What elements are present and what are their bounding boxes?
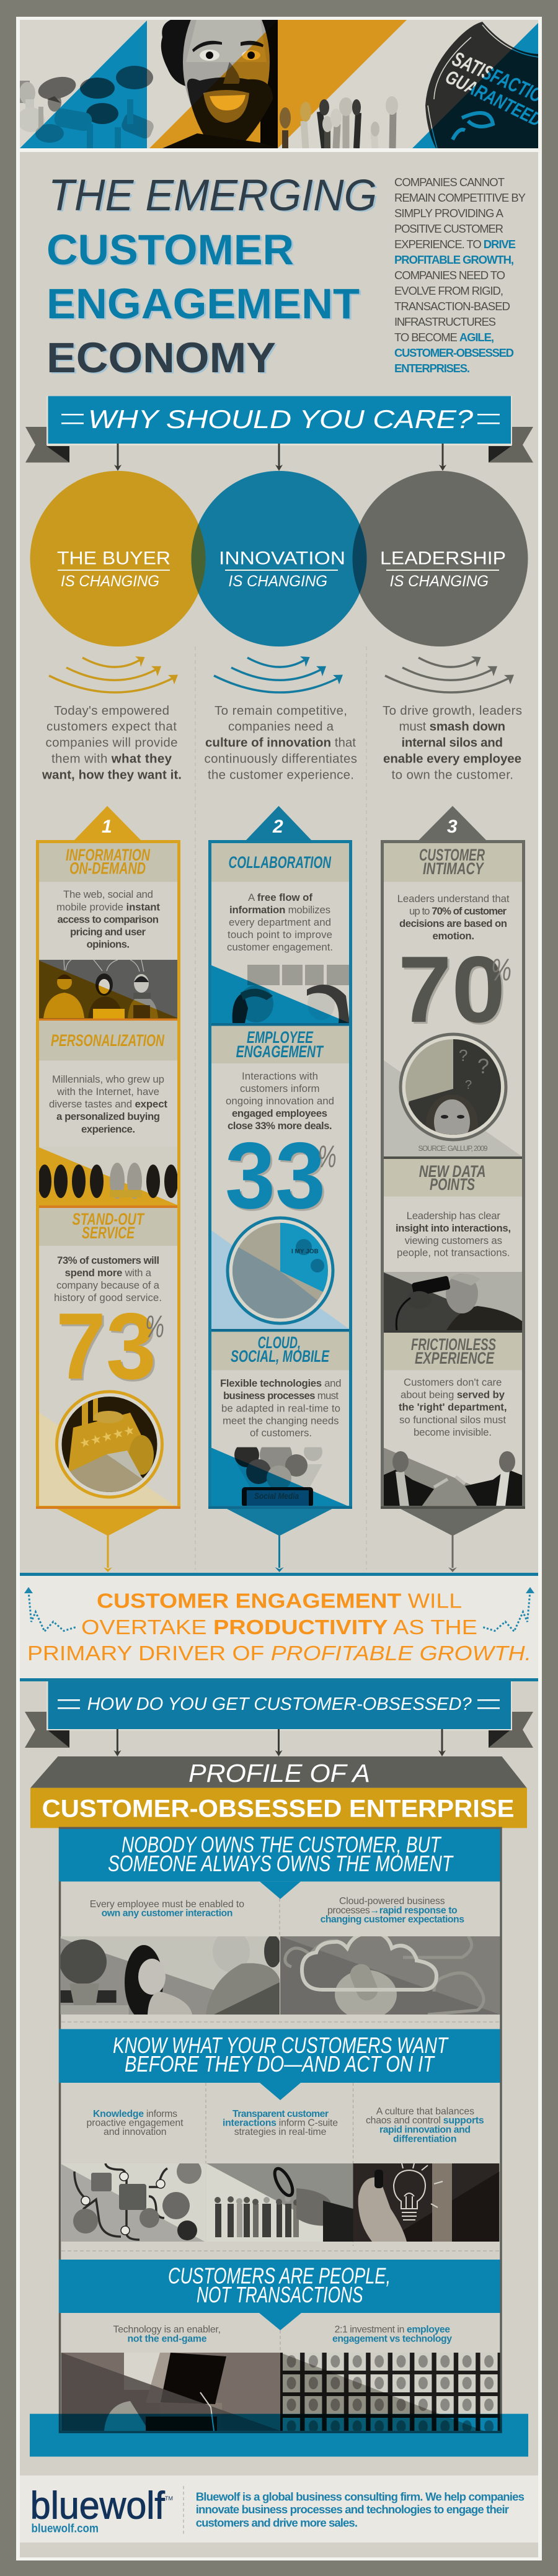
text: culture: differentiation — [393, 2134, 456, 2144]
column 3 frame — [382, 841, 523, 1508]
section: information on-demand: opinions. — [87, 939, 130, 950]
section: collaboration: COLLABORATION — [228, 853, 331, 872]
arrows from banner to profile — [113, 1729, 446, 1756]
blue triangle over shield — [412, 23, 538, 148]
stat: 70 percent: 70 — [398, 937, 505, 1042]
circle: the buyer — [30, 471, 206, 646]
section: frictionless experience: about being served by — [401, 1389, 505, 1401]
text: cloud-powered: changing customer expectations — [321, 1915, 464, 1925]
stat: 33 percent: % — [318, 1139, 337, 1174]
circle: innovation — [191, 471, 367, 646]
section: stand-out service — [37, 1205, 179, 1304]
text: transparent interactions — [223, 2109, 338, 2137]
circle: leadership — [352, 471, 528, 646]
intro paragraph: EVOLVE FROM RIGID, — [394, 284, 503, 297]
text: innovation: To remain competitive, — [215, 704, 347, 718]
section: personalization: PERSONALIZATION — [51, 1031, 164, 1050]
header image strip — [20, 20, 538, 148]
speech bubbles illustration — [17, 66, 156, 149]
intro paragraph: ENTERPRISES. — [394, 362, 470, 375]
section 3: customers are people — [59, 2260, 500, 2431]
text: the buyer: Today's empowered — [54, 704, 169, 718]
profile heading — [30, 1756, 527, 1828]
section: collaboration — [211, 843, 349, 953]
company description: customers and drive more sales. — [196, 2516, 358, 2529]
text: technology: not the end-game — [128, 2334, 207, 2345]
section: stand-out service: history of good service. — [54, 1292, 162, 1304]
section: cloud, social, mobile — [210, 1329, 350, 1439]
intro paragraph: TRANSACTION-BASED — [394, 300, 510, 313]
blue heading band 3 — [59, 2260, 500, 2330]
text: culture — [366, 2106, 484, 2144]
text: own any customer interaction — [90, 1899, 244, 1918]
icon: dotted rising arrow right — [483, 1587, 534, 1632]
section: collaboration: information mobilizes — [229, 904, 330, 916]
raised hands — [280, 96, 398, 148]
number tab 3 — [418, 806, 487, 841]
label: the buyer — [57, 548, 170, 590]
logo: bluewolf: bluewolf — [30, 2484, 166, 2528]
dashed separator 2 — [61, 2250, 499, 2252]
image: finger touching cloud — [280, 1933, 500, 2019]
image: woman talking to customer — [61, 1936, 280, 2015]
section: information on-demand: mobile provide instant — [56, 901, 160, 913]
text: own any customer interaction: own any customer interaction — [102, 1908, 232, 1918]
section: new data points: people, not transactions. — [397, 1247, 510, 1258]
conclusion line 1: CUSTOMER ENGAGEMENT WILL — [97, 1590, 462, 1612]
intro paragraph: CUSTOMER-OBSESSED — [394, 346, 514, 359]
company description: Bluewolf is a global business consulting firm. We help companies — [196, 2490, 525, 2503]
label: leadership: IS CHANGING — [390, 573, 489, 590]
banner: why should you care — [25, 396, 533, 463]
section: collaboration: A free flow of — [248, 892, 312, 903]
section: employee engagement — [210, 1023, 350, 1132]
number tab 1 — [74, 806, 141, 841]
section: personalization: Millennials, who grew up — [52, 1073, 164, 1085]
text: leadership: to own the customer. — [392, 768, 513, 782]
text: knowledge: and innovation — [104, 2127, 167, 2137]
section: customer intimacy: CUSTOMER — [419, 846, 485, 864]
column 1: the buyer — [36, 806, 180, 1572]
intro paragraph: SIMPLY PROVIDING A — [394, 207, 504, 220]
blue heading band 1: SOMEONE ALWAYS OWNS THE MOMENT — [108, 1851, 454, 1876]
section: personalization: experience. — [81, 1123, 135, 1135]
company description: innovate business processes and technologies to engage their — [196, 2503, 509, 2516]
intro paragraph: POSITIVE CUSTOMER — [394, 222, 503, 235]
section: new data points: Leadership has clear — [407, 1210, 500, 1222]
text: knowledge: Knowledge informs — [93, 2109, 177, 2119]
section: employee engagement: ENGAGEMENT — [236, 1042, 324, 1061]
section: personalization: a personalized buying — [56, 1111, 160, 1122]
gold parallelogram — [149, 20, 407, 148]
intro paragraph: COMPANIES CANNOT — [394, 176, 505, 189]
section: employee engagement: customers inform — [240, 1083, 320, 1094]
section: employee engagement: ongoing innovation and — [226, 1095, 334, 1107]
conclusion panel — [20, 1573, 538, 1681]
section: new data points: NEW DATA — [419, 1162, 486, 1181]
banner: why should you care: WHY SHOULD YOU CARE? — [88, 405, 474, 434]
section: cloud, social, mobile: of customers. — [250, 1427, 312, 1439]
section: employee engagement: EMPLOYEE — [247, 1028, 314, 1047]
intro paragraph: REMAIN COMPETITIVE BY — [394, 191, 526, 204]
image: two men pointing at each other — [383, 1447, 523, 1507]
section: cloud, social, mobile: CLOUD, — [258, 1333, 301, 1352]
curved arrows: buyer — [49, 656, 178, 692]
section: information on-demand — [39, 843, 177, 950]
section: personalization: with the Internet, have — [56, 1086, 159, 1098]
text: cloud-powered: Cloud-powered business — [339, 1896, 445, 1907]
section: customer intimacy: up to 70% of customer — [409, 905, 507, 917]
number tab 2 — [246, 806, 312, 841]
column 2: innovation — [208, 806, 352, 1572]
intro paragraph: EXPERIENCE. TO DRIVE — [394, 238, 516, 251]
text: own any customer interaction: Every employee must be enabled to — [90, 1899, 244, 1910]
footer — [20, 2475, 538, 2542]
text: transparent interactions: Transparent customer — [232, 2109, 329, 2119]
round image: woman with question marks: ? — [465, 1078, 472, 1092]
text: the buyer: customers expect that — [46, 720, 177, 734]
section: frictionless experience: FRICTIONLESS — [411, 1335, 496, 1354]
section: cloud, social, mobile: business processes must — [223, 1390, 339, 1402]
number tab 1: 1 — [102, 816, 112, 837]
image: people looking at sticky notes — [210, 965, 350, 1023]
text: leadership: must smash down — [399, 720, 505, 734]
column 2 frame — [210, 841, 351, 1508]
text: cloud-powered: processes→rapid response to — [327, 1905, 458, 1916]
label: innovation — [219, 548, 345, 590]
text: culture: chaos and control supports — [366, 2116, 484, 2126]
round image: woman with question marks — [400, 1034, 506, 1154]
section: cloud, social, mobile: SOCIAL, MOBILE — [231, 1347, 330, 1366]
section: customer intimacy: emotion. — [433, 930, 474, 942]
blue heading band 3: NOT TRANSACTIONS — [197, 2282, 363, 2307]
logo: bluewolf: TM — [165, 2495, 173, 2502]
bottom pointer and arrow 3 — [381, 1506, 525, 1572]
blue heading band 2: BEFORE THEY DO—AND ACT ON IT — [125, 2051, 435, 2077]
intro paragraph: PROFITABLE GROWTH, — [394, 253, 514, 266]
image: row of shoes — [37, 1147, 179, 1205]
pale blue triangle — [211, 1230, 349, 1329]
source note: SOURCE: GALLUP, 2009 — [418, 1145, 487, 1153]
image: three people under chalk arrows — [37, 960, 179, 1019]
company description — [196, 2490, 525, 2529]
three overlapping circles — [30, 471, 528, 646]
blue heading band 2: KNOW WHAT YOUR CUSTOMERS WANT — [113, 2033, 449, 2058]
section: customer intimacy: INTIMACY — [423, 859, 485, 878]
image: social media bubbles and phone: Social Media — [254, 1491, 299, 1501]
text: the buyer: companies will provide — [46, 735, 177, 749]
section: information on-demand: INFORMATION — [66, 846, 150, 864]
label: leadership: LEADERSHIP — [380, 548, 506, 569]
title line: engagement: ENGAGEMENT — [46, 280, 360, 328]
blue heading band 3: CUSTOMERS ARE PEOPLE, — [168, 2263, 391, 2289]
section: information on-demand: ON-DEMAND — [69, 859, 146, 877]
section: frictionless experience: become invisible. — [414, 1426, 492, 1438]
text: the buyer — [42, 704, 182, 782]
section: collaboration: touch point to improve — [228, 929, 332, 941]
conclusion line 3: PRIMARY DRIVER OF PROFITABLE GROWTH. — [27, 1642, 531, 1665]
image: man with binoculars — [383, 1272, 523, 1331]
section: customer intimacy — [384, 843, 522, 942]
conclusion line 2: OVERTAKE PRODUCTIVITY AS THE — [81, 1616, 477, 1639]
banner: how do you get customer-obsessed — [25, 1681, 533, 1748]
number tab 3: 3 — [447, 816, 458, 837]
text: leadership: enable every employee — [383, 752, 521, 766]
text: culture: A culture that balances — [376, 2106, 474, 2117]
section: stand-out service: company because of a — [56, 1279, 160, 1291]
section: personalization — [37, 1019, 179, 1135]
text: investment — [332, 2325, 452, 2345]
label: the buyer: THE BUYER — [57, 548, 170, 569]
section 1: nobody owns the customer — [59, 1829, 500, 2022]
intro paragraph: COMPANIES NEED TO — [394, 269, 505, 282]
column 1 frame — [37, 841, 179, 1508]
icon: dotted rising arrow left — [24, 1587, 76, 1632]
blue heading band 1 — [59, 1829, 500, 1899]
section: information on-demand: pricing and user — [70, 926, 146, 938]
section: new data points: viewing customers as — [405, 1235, 502, 1246]
text: cloud-powered — [321, 1896, 464, 1925]
image: hand drawing light bulb — [353, 2163, 499, 2242]
section: new data points: insight into interactions, — [396, 1222, 511, 1234]
stat: 73 percent: % — [145, 1309, 164, 1344]
text: innovation: culture of innovation that — [205, 735, 356, 749]
intro paragraph: INFRASTRUCTURES — [394, 315, 496, 328]
curved arrows: leadership — [385, 656, 514, 692]
section: collaboration: customer engagement. — [227, 941, 333, 953]
section: personalization: diverse tastes and expect — [49, 1098, 167, 1110]
section: employee engagement: engaged employees — [232, 1107, 327, 1119]
section: frictionless experience: so functional silos must — [399, 1414, 506, 1426]
section: stand-out service: 73% of customers will — [57, 1254, 159, 1266]
profile heading: PROFILE OF A — [188, 1759, 370, 1787]
curved arrows: innovation — [214, 656, 343, 692]
profile container frame — [60, 1828, 501, 2432]
text: innovation: continuously differentiates — [205, 752, 357, 766]
stat: 70 percent: % — [491, 952, 512, 987]
title line: customer: CUSTOMER — [46, 226, 294, 274]
image: social network diagram — [61, 2159, 206, 2242]
round image: i love my job: I MY JOB — [291, 1248, 319, 1255]
label: innovation: INNOVATION — [219, 548, 345, 569]
section: customer intimacy: decisions are based on — [399, 918, 507, 929]
dashed separator 1 — [61, 2021, 499, 2023]
title — [46, 171, 377, 382]
section: frictionless experience — [383, 1330, 523, 1438]
round image: woman with question marks: ? — [459, 1046, 467, 1065]
website: bluewolf.com — [31, 2523, 99, 2535]
blue band over bottom images — [30, 2414, 528, 2457]
section: information on-demand: The web, social and — [63, 888, 153, 900]
image: wall of portraits — [280, 2353, 500, 2431]
satisfaction guaranteed shield — [425, 22, 538, 148]
portrait of smiling man — [161, 20, 278, 148]
section: new data points: POINTS — [430, 1175, 475, 1194]
section: stand-out service: SERVICE — [82, 1223, 135, 1242]
image: social media bubbles and phone — [211, 1447, 347, 1506]
bottom pointer and arrow 2 — [208, 1506, 352, 1572]
banner: how do you get customer-obsessed: HOW DO YOU GET CUSTOMER-OBSESSED? — [87, 1694, 472, 1714]
label: leadership — [380, 548, 506, 590]
section 2: know what your customers want — [59, 2029, 500, 2251]
number tab 2: 2 — [272, 816, 283, 837]
section: cloud, social, mobile: meet the changing needs — [223, 1415, 339, 1427]
intro paragraph: TO BECOME AGILE, — [394, 331, 494, 344]
text: innovation — [205, 704, 357, 782]
section: employee engagement: Interactions with — [242, 1070, 318, 1082]
round image: shopping bag with stars: ★★★★★ — [78, 1423, 136, 1451]
section: stand-out service: STAND-OUT — [72, 1210, 145, 1228]
arrows from banner to circles — [114, 444, 446, 471]
stat: 73 percent: 73 — [56, 1294, 156, 1399]
text: technology — [113, 2325, 221, 2345]
text: the buyer: them with what they — [51, 752, 172, 766]
text: knowledge — [87, 2109, 184, 2137]
title line: economy: ECONOMY — [46, 334, 276, 382]
section: employee engagement: close 33% more deals. — [228, 1120, 332, 1132]
label: innovation: IS CHANGING — [228, 573, 327, 590]
section: frictionless experience: EXPERIENCE — [415, 1349, 495, 1367]
stat: 33 percent: 33 — [225, 1123, 326, 1228]
bottom pointer and arrow 1 — [36, 1506, 180, 1572]
text: investment: 2:1 investment in employee — [335, 2325, 450, 2335]
section: cloud, social, mobile: be adapted in real-time to — [221, 1402, 340, 1415]
blue heading band 2 — [59, 2029, 500, 2100]
section: cloud, social, mobile: Flexible technologies and — [220, 1377, 341, 1389]
pale triangle — [37, 1411, 176, 1506]
blue heading band 1: NOBODY OWNS THE CUSTOMER, BUT — [122, 1832, 442, 1858]
dashed column dividers — [195, 646, 366, 1570]
text: leadership: To drive growth, leaders — [383, 704, 522, 718]
text: knowledge: proactive engagement — [87, 2118, 184, 2128]
image: old computer — [61, 2353, 280, 2431]
round image: woman with question marks: ? — [477, 1055, 489, 1078]
title line: the emerging: THE EMERGING — [48, 171, 377, 220]
text: innovation: companies need a — [228, 720, 334, 734]
column 3: leadership — [381, 806, 525, 1572]
section: information on-demand: access to comparison — [57, 913, 159, 926]
intro paragraph — [394, 176, 526, 375]
text: culture: rapid innovation and — [379, 2124, 471, 2135]
section: customer intimacy: Leaders understand that — [397, 893, 510, 905]
section: stand-out service: spend more with a — [64, 1267, 152, 1279]
round image: i love my job — [226, 1216, 335, 1325]
text: leadership — [383, 704, 522, 782]
section: frictionless experience: Customers don't care — [404, 1376, 502, 1389]
text: technology: Technology is an enabler, — [113, 2325, 221, 2335]
text: the buyer: want, how they want it. — [42, 768, 182, 782]
text: leadership: internal silos and — [402, 735, 503, 749]
round image: shopping bag with stars — [57, 1392, 162, 1501]
profile heading: CUSTOMER-OBSESSED ENTERPRISE — [42, 1796, 515, 1823]
image: people under magnifying glass — [206, 2163, 353, 2242]
section: frictionless experience: the 'right' department, — [399, 1402, 507, 1413]
blue triangle — [20, 20, 147, 148]
text: innovation: the customer experience. — [208, 768, 354, 782]
text: investment: engagement vs technology — [332, 2334, 452, 2345]
text: transparent interactions: strategies in real-time — [234, 2127, 327, 2137]
pale grey triangle — [384, 1060, 522, 1156]
text: transparent interactions: interactions inform C-suite — [223, 2118, 338, 2128]
section: collaboration: every department and — [229, 916, 331, 928]
label: the buyer: IS CHANGING — [61, 573, 159, 590]
section: new data points — [383, 1156, 523, 1258]
